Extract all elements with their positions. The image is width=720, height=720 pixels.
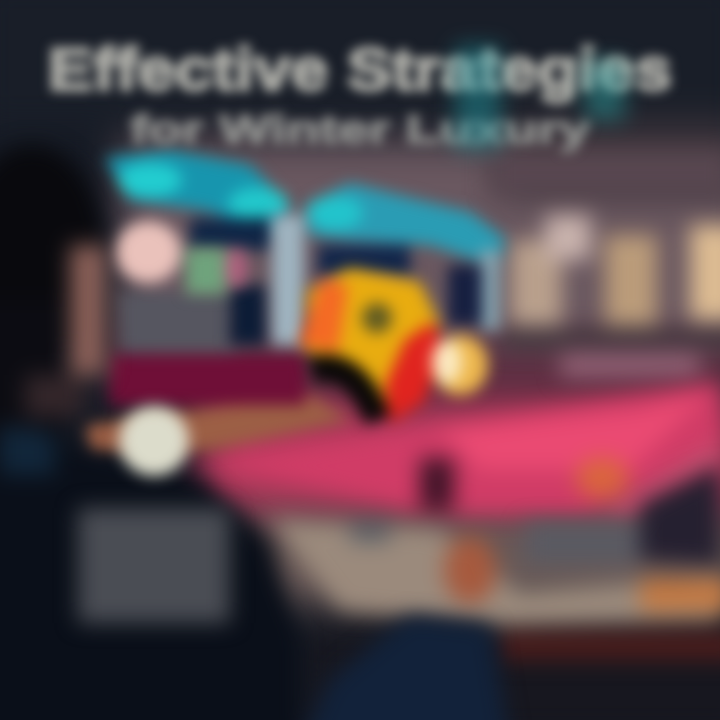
- teal awning left: [105, 150, 290, 250]
- arcade columns on the right: [490, 150, 720, 378]
- market stall signs: [115, 221, 247, 294]
- pink carpet floor: [195, 382, 720, 515]
- title: for Winter Luxury: [130, 108, 591, 152]
- grey laptop panel: [78, 508, 230, 623]
- title: [48, 36, 672, 152]
- lower desk area: [270, 465, 720, 660]
- wooden floor strip: [85, 292, 350, 455]
- teal glow on title: [455, 45, 625, 150]
- title: Effective Strategies: [48, 36, 672, 103]
- white ball: [119, 406, 189, 476]
- yellow and orange centre object: [298, 268, 488, 424]
- foreground person silhouette: [0, 145, 510, 720]
- teal awning right: [230, 183, 505, 345]
